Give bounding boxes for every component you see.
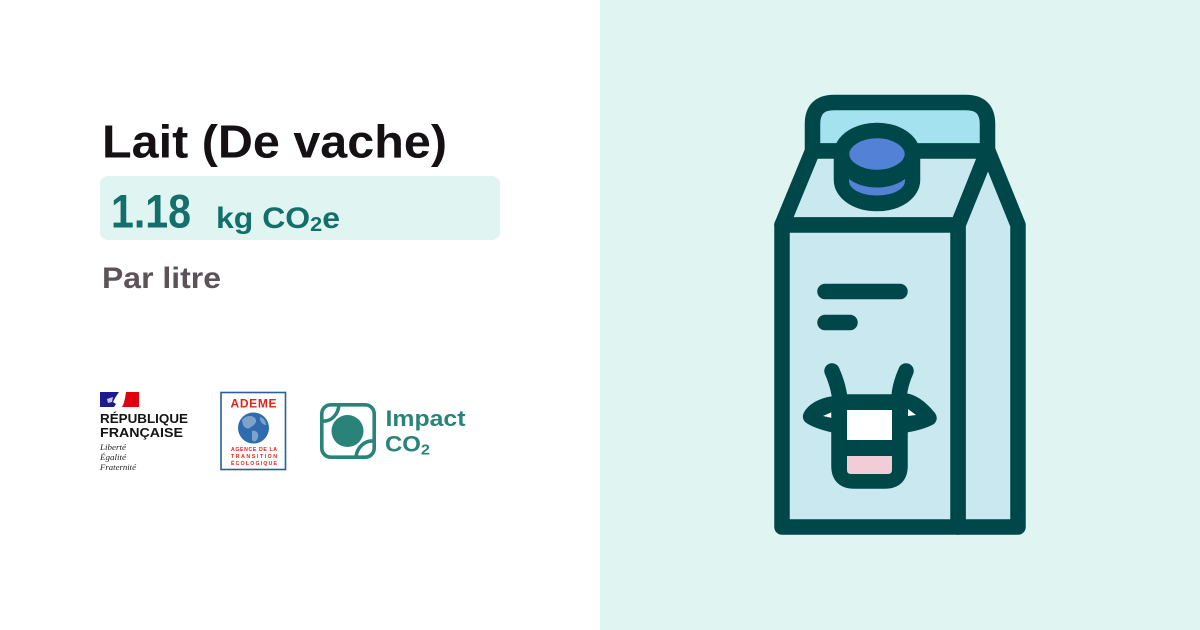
- motto: Égalité: [99, 452, 127, 462]
- impact wordmark: Impact: [386, 406, 466, 431]
- ademe caption: ÉCOLOGIQUE: [231, 459, 278, 467]
- francaise wordmark: FRANÇAISE: [100, 425, 183, 440]
- value unit: e: [322, 202, 340, 235]
- ademe caption: AGENCE DE LA: [231, 447, 277, 453]
- value unit: kg CO: [216, 202, 303, 235]
- panel: illustration background: [600, 0, 1200, 630]
- cow face: [839, 402, 900, 481]
- motto: Liberté: [99, 443, 127, 452]
- text lines on carton: [825, 292, 900, 322]
- ademe wordmark: ADEME: [230, 396, 276, 410]
- carton front panel: [782, 225, 958, 527]
- cow ear highlights: [823, 409, 916, 418]
- republique wordmark: RÉPUBLIQUE: [100, 411, 188, 426]
- value number: 1.18: [111, 184, 191, 238]
- co2 wordmark: CO: [385, 432, 418, 456]
- logo: République Française: [99, 392, 188, 472]
- carton side panel: [958, 151, 1018, 527]
- title: Lait (De vache): [102, 116, 447, 168]
- co2 wordmark: 2: [421, 442, 430, 458]
- value band: [100, 176, 500, 240]
- icon: milk carton: [782, 102, 1018, 527]
- cow horns: [832, 371, 906, 400]
- cow forehead patch: [847, 410, 892, 440]
- value unit: 2: [310, 214, 322, 236]
- cap lower rim: [849, 179, 905, 196]
- ademe caption: TRANSITION: [231, 454, 277, 460]
- bottle cap: [842, 130, 912, 204]
- subtitle: Par litre: [102, 262, 221, 295]
- carton top flap: [812, 102, 988, 151]
- motto: [99, 443, 136, 472]
- ademe caption: [231, 447, 278, 467]
- icon: cow head: [803, 371, 937, 481]
- cow ears: [803, 393, 937, 433]
- cap top: [842, 130, 912, 178]
- icon: french flag: [100, 392, 139, 407]
- logo: ADEME: [221, 392, 286, 470]
- icon: impact co2 mark: [322, 405, 374, 457]
- carton roof: [782, 151, 988, 225]
- icon: globe: [238, 412, 269, 444]
- cow muzzle: [847, 456, 892, 474]
- logo: Impact CO2: [322, 405, 466, 458]
- motto: Fraternité: [99, 463, 136, 472]
